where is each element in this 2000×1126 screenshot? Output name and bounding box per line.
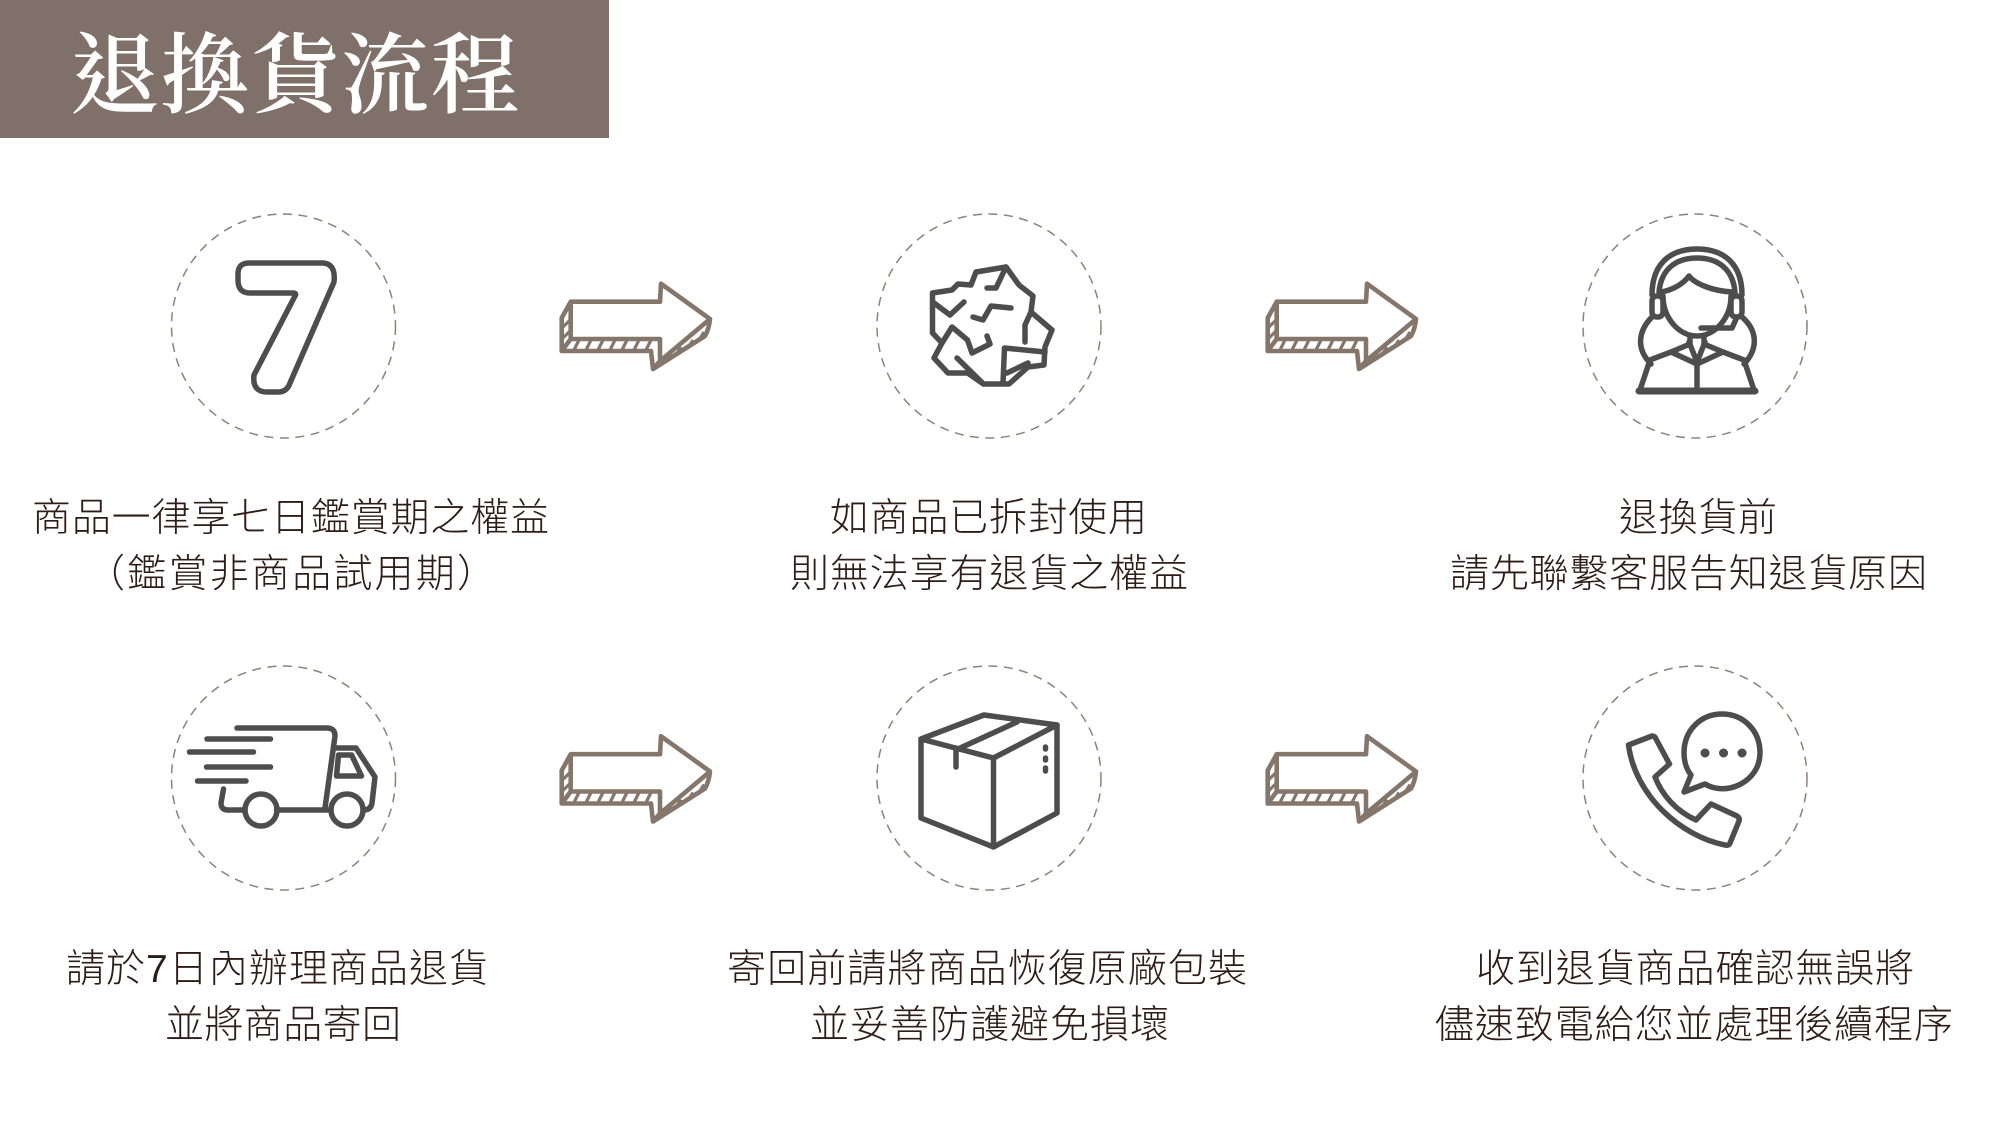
step 4: ship within 7 days bbox=[172, 666, 396, 890]
step 2: opened product bbox=[877, 214, 1101, 438]
icon: cardboard box bbox=[921, 715, 1057, 847]
title banner: 退換貨流程 bbox=[71, 29, 519, 126]
text: step 2 bbox=[790, 497, 1188, 596]
text: step 3: 退換貨前 bbox=[1619, 497, 1777, 540]
icon: number seven bbox=[238, 263, 334, 392]
text: step 6: 儘速致電給您並處理後續程序 bbox=[1435, 1004, 1953, 1047]
arrow: step 1 to 2 bbox=[562, 284, 710, 369]
text: step 1: 商品一律享七日鑑賞期之權益 bbox=[32, 497, 549, 540]
text: step 4 bbox=[66, 948, 488, 1047]
step 6: confirmation call bbox=[1583, 666, 1807, 890]
text: step 5 bbox=[727, 948, 1247, 1047]
step 1: seven day period bbox=[172, 214, 396, 438]
text: step 6 bbox=[1435, 948, 1953, 1047]
step 5: original packaging bbox=[877, 666, 1101, 890]
icon: phone with speech bubble bbox=[1628, 714, 1760, 845]
text: step 1: （鑑賞非商品試用期） bbox=[86, 553, 496, 596]
arrow: step 5 to 6 bbox=[1268, 736, 1416, 822]
text: step 2: 則無法享有退貨之權益 bbox=[790, 553, 1188, 596]
text: step 5: 並妥善防護避免損壞 bbox=[810, 1004, 1169, 1047]
text: step 3 bbox=[1450, 497, 1927, 596]
text: step 6: 收到退貨商品確認無誤將 bbox=[1476, 948, 1914, 991]
text: step 2: 如商品已拆封使用 bbox=[830, 497, 1147, 540]
arrow: step 4 to 5 bbox=[562, 736, 710, 822]
text: step 3: 請先聯繫客服告知退貨原因 bbox=[1450, 553, 1927, 596]
text: step 5: 寄回前請將商品恢復原廠包裝 bbox=[727, 948, 1247, 991]
arrow: step 2 to 3 bbox=[1268, 284, 1416, 369]
text: step 4: 並將商品寄回 bbox=[165, 1004, 401, 1047]
text: step 1 bbox=[32, 497, 549, 596]
title banner bbox=[0, 0, 609, 138]
text: step 4: 請於7日內辦理商品退貨 bbox=[66, 948, 488, 991]
icon: crumpled paper bbox=[932, 267, 1052, 384]
icon: headset agent bbox=[1639, 249, 1755, 391]
icon: delivery truck bbox=[190, 728, 375, 826]
step 3: customer service bbox=[1583, 214, 1807, 438]
